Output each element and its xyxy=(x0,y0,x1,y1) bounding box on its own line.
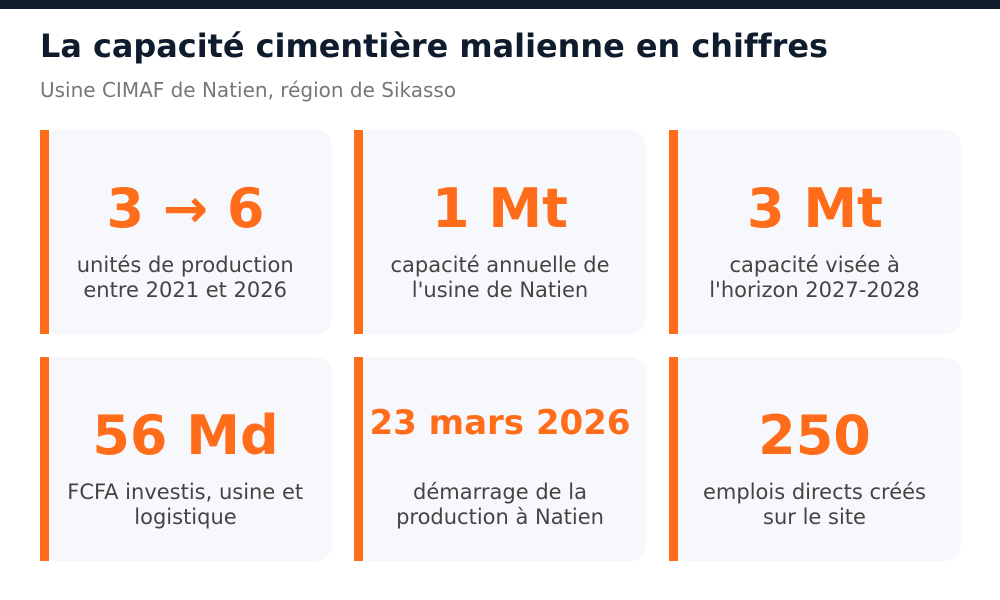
card: investissement xyxy=(40,357,332,561)
card: capacité visée: l'horizon 2027-2028 xyxy=(709,278,920,302)
card: unités de production: unités de production xyxy=(77,253,294,277)
card: capacité visée: 3 Mt xyxy=(747,177,883,240)
card: emplois: emplois directs créés xyxy=(703,480,926,504)
subtitle: Usine CIMAF de Natien, région de Sikasso xyxy=(40,78,456,102)
card: emplois: sur le site xyxy=(763,505,866,529)
card: investissement: logistique xyxy=(134,505,237,529)
card: capacité visée xyxy=(669,130,961,334)
card: démarrage xyxy=(354,357,646,561)
card: démarrage: production à Natien xyxy=(396,505,604,529)
card: unités de production: entre 2021 et 2026 xyxy=(83,278,287,302)
card: emplois xyxy=(669,357,961,561)
card: investissement: FCFA investis, usine et xyxy=(67,480,303,504)
title: La capacité cimentière malienne en chiffres xyxy=(40,27,828,65)
card: capacité annuelle: 1 Mt xyxy=(432,177,568,240)
card: capacité annuelle xyxy=(354,130,646,334)
card: démarrage: 23 mars 2026 xyxy=(370,403,630,443)
card: capacité annuelle: l'usine de Natien xyxy=(412,278,588,302)
card: capacité visée: capacité visée à xyxy=(729,253,900,277)
card: emplois: 250 xyxy=(758,404,871,467)
card: unités de production xyxy=(40,130,332,334)
top band xyxy=(0,0,1000,9)
card: démarrage: démarrage de la xyxy=(413,480,587,504)
card: capacité annuelle: capacité annuelle de xyxy=(390,253,610,277)
card: unités de production: 3 → 6 xyxy=(106,177,264,240)
card: investissement: 56 Md xyxy=(92,404,279,467)
